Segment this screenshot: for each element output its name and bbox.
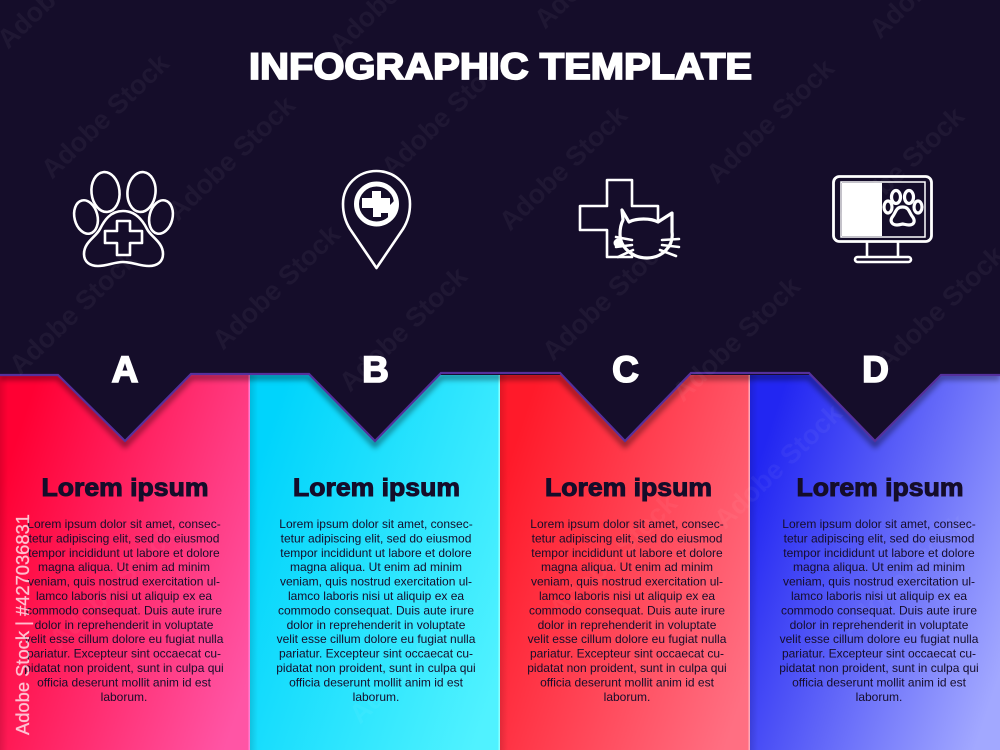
- body A: tempor incididunt ut labore et dolore: [28, 546, 220, 560]
- icon: map pin with vet cross: [343, 171, 410, 268]
- watermarks: Adobe Stock: [833, 507, 974, 644]
- letter B: B: [362, 349, 389, 390]
- body B: tempor incididunt ut labore et dolore: [280, 546, 472, 560]
- body D: velit esse cillum dolore eu fugiat nulla: [780, 632, 979, 646]
- body A: velit esse cillum dolore eu fugiat nulla: [25, 632, 224, 646]
- body C: dolor in reprehenderit in voluptate: [538, 618, 717, 632]
- watermarks: Adobe Stock: [35, 47, 176, 184]
- watermarks: Adobe Stock: [375, 45, 516, 182]
- heading B: Lorem ipsum: [293, 474, 460, 502]
- letter D: D: [862, 349, 889, 390]
- body D: pariatur. Excepteur sint occaecat cu-: [782, 647, 976, 661]
- body D: laborum.: [856, 690, 902, 704]
- body A: pariatur. Excepteur sint occaecat cu-: [27, 647, 221, 661]
- watermarks: Adobe Stock: [543, 487, 684, 624]
- watermarks: Adobe Stock: [666, 270, 807, 407]
- body D: veniam, quis nostrud exercitation ul-: [783, 575, 975, 589]
- body B: veniam, quis nostrud exercitation ul-: [280, 575, 472, 589]
- body B: commodo consequat. Duis aute irure: [278, 603, 474, 617]
- panel separators: [248, 375, 750, 750]
- watermarks: Adobe Stock: [343, 592, 484, 729]
- body A: dolor in reprehenderit in voluptate: [35, 618, 214, 632]
- text block: C: [527, 474, 727, 704]
- heading A: Lorem ipsum: [42, 474, 208, 502]
- body B: officia deserunt mollit anim id est: [289, 675, 464, 689]
- panel: A: [0, 375, 250, 750]
- heading D: Lorem ipsum: [796, 474, 964, 502]
- panel: B: [250, 375, 500, 750]
- body B: laborum.: [353, 690, 399, 704]
- watermarks: Adobe Stock: [206, 218, 347, 355]
- notch outline: [0, 373, 1000, 441]
- side watermark: stock id: Adobe Stock | #427036831: [13, 514, 33, 735]
- body B: velit esse cillum dolore eu fugiat nulla: [277, 632, 476, 646]
- body C: officia deserunt mollit anim id est: [540, 675, 715, 689]
- body A: officia deserunt mollit anim id est: [37, 675, 212, 689]
- dark header with notches: [0, 0, 1000, 441]
- body C: lamco laboris nisi ut aliquip ex ea: [539, 589, 715, 603]
- body C: tempor incididunt ut labore et dolore: [531, 546, 723, 560]
- watermarks: Adobe Stock: [493, 99, 634, 236]
- text block: A: [24, 474, 224, 704]
- body B: Lorem ipsum dolor sit amet, consec-: [279, 517, 473, 531]
- watermarks: Adobe Stock: [536, 229, 677, 366]
- body D: officia deserunt mollit anim id est: [792, 675, 967, 689]
- body B: pidatat non proident, sunt in culpa qui: [276, 661, 476, 675]
- body C: tetur adipiscing elit, sed do eiusmod: [532, 531, 722, 545]
- body B: magna aliqua. Ut enim ad minim: [290, 560, 462, 574]
- watermarks: Adobe Stock: [830, 100, 971, 237]
- watermarks: Adobe Stock: [43, 517, 184, 654]
- body B: lamco laboris nisi ut aliquip ex ea: [288, 589, 464, 603]
- icon: cross with cat: [580, 180, 679, 258]
- body D: dolor in reprehenderit in voluptate: [790, 618, 969, 632]
- body C: commodo consequat. Duis aute irure: [529, 603, 725, 617]
- icon: paw with cross: [71, 171, 176, 266]
- body C: Lorem ipsum dolor sit amet, consec-: [530, 517, 724, 531]
- body A: magna aliqua. Ut enim ad minim: [38, 560, 210, 574]
- body C: pidatat non proident, sunt in culpa qui: [527, 661, 727, 675]
- body D: Lorem ipsum dolor sit amet, consec-: [782, 517, 976, 531]
- body A: laborum.: [101, 690, 147, 704]
- body C: veniam, quis nostrud exercitation ul-: [531, 575, 723, 589]
- body A: commodo consequat. Duis aute irure: [26, 603, 222, 617]
- body D: lamco laboris nisi ut aliquip ex ea: [791, 589, 967, 603]
- heading C: Lorem ipsum: [545, 474, 712, 502]
- letter A: A: [112, 349, 138, 390]
- body A: veniam, quis nostrud exercitation ul-: [28, 575, 220, 589]
- body A: tetur adipiscing elit, sed do eiusmod: [29, 531, 219, 545]
- body B: tetur adipiscing elit, sed do eiusmod: [281, 531, 471, 545]
- body D: tetur adipiscing elit, sed do eiusmod: [784, 531, 974, 545]
- icon: monitor with paw x-ray: [834, 176, 932, 262]
- text block: D: [779, 474, 979, 704]
- body C: pariatur. Excepteur sint occaecat cu-: [530, 647, 724, 661]
- watermarks: Adobe Stock: [700, 52, 841, 189]
- body D: commodo consequat. Duis aute irure: [781, 603, 977, 617]
- title: INFOGRAPHIC TEMPLATE: [249, 46, 752, 87]
- body D: tempor incididunt ut labore et dolore: [783, 546, 975, 560]
- body D: pidatat non proident, sunt in culpa qui: [779, 661, 979, 675]
- text block: B: [276, 474, 476, 704]
- body C: magna aliqua. Ut enim ad minim: [541, 560, 713, 574]
- body A: lamco laboris nisi ut aliquip ex ea: [36, 589, 212, 603]
- watermarks: Adobe Stock: [333, 260, 474, 397]
- body A: Lorem ipsum dolor sit amet, consec-: [27, 517, 221, 531]
- panel: C: [500, 375, 750, 750]
- body D: magna aliqua. Ut enim ad minim: [793, 560, 965, 574]
- watermarks: Adobe Stock: [3, 243, 144, 380]
- notch shadow: [0, 377, 1000, 445]
- letter C: C: [612, 349, 639, 390]
- body B: pariatur. Excepteur sint occaecat cu-: [279, 647, 473, 661]
- body C: velit esse cillum dolore eu fugiat nulla: [528, 632, 727, 646]
- watermarks: Adobe Stock: [161, 89, 302, 226]
- watermarks: Adobe Stock: [708, 397, 849, 534]
- body B: dolor in reprehenderit in voluptate: [287, 618, 466, 632]
- panel: D: [750, 375, 1000, 750]
- body A: pidatat non proident, sunt in culpa qui: [24, 661, 224, 675]
- body C: laborum.: [604, 690, 650, 704]
